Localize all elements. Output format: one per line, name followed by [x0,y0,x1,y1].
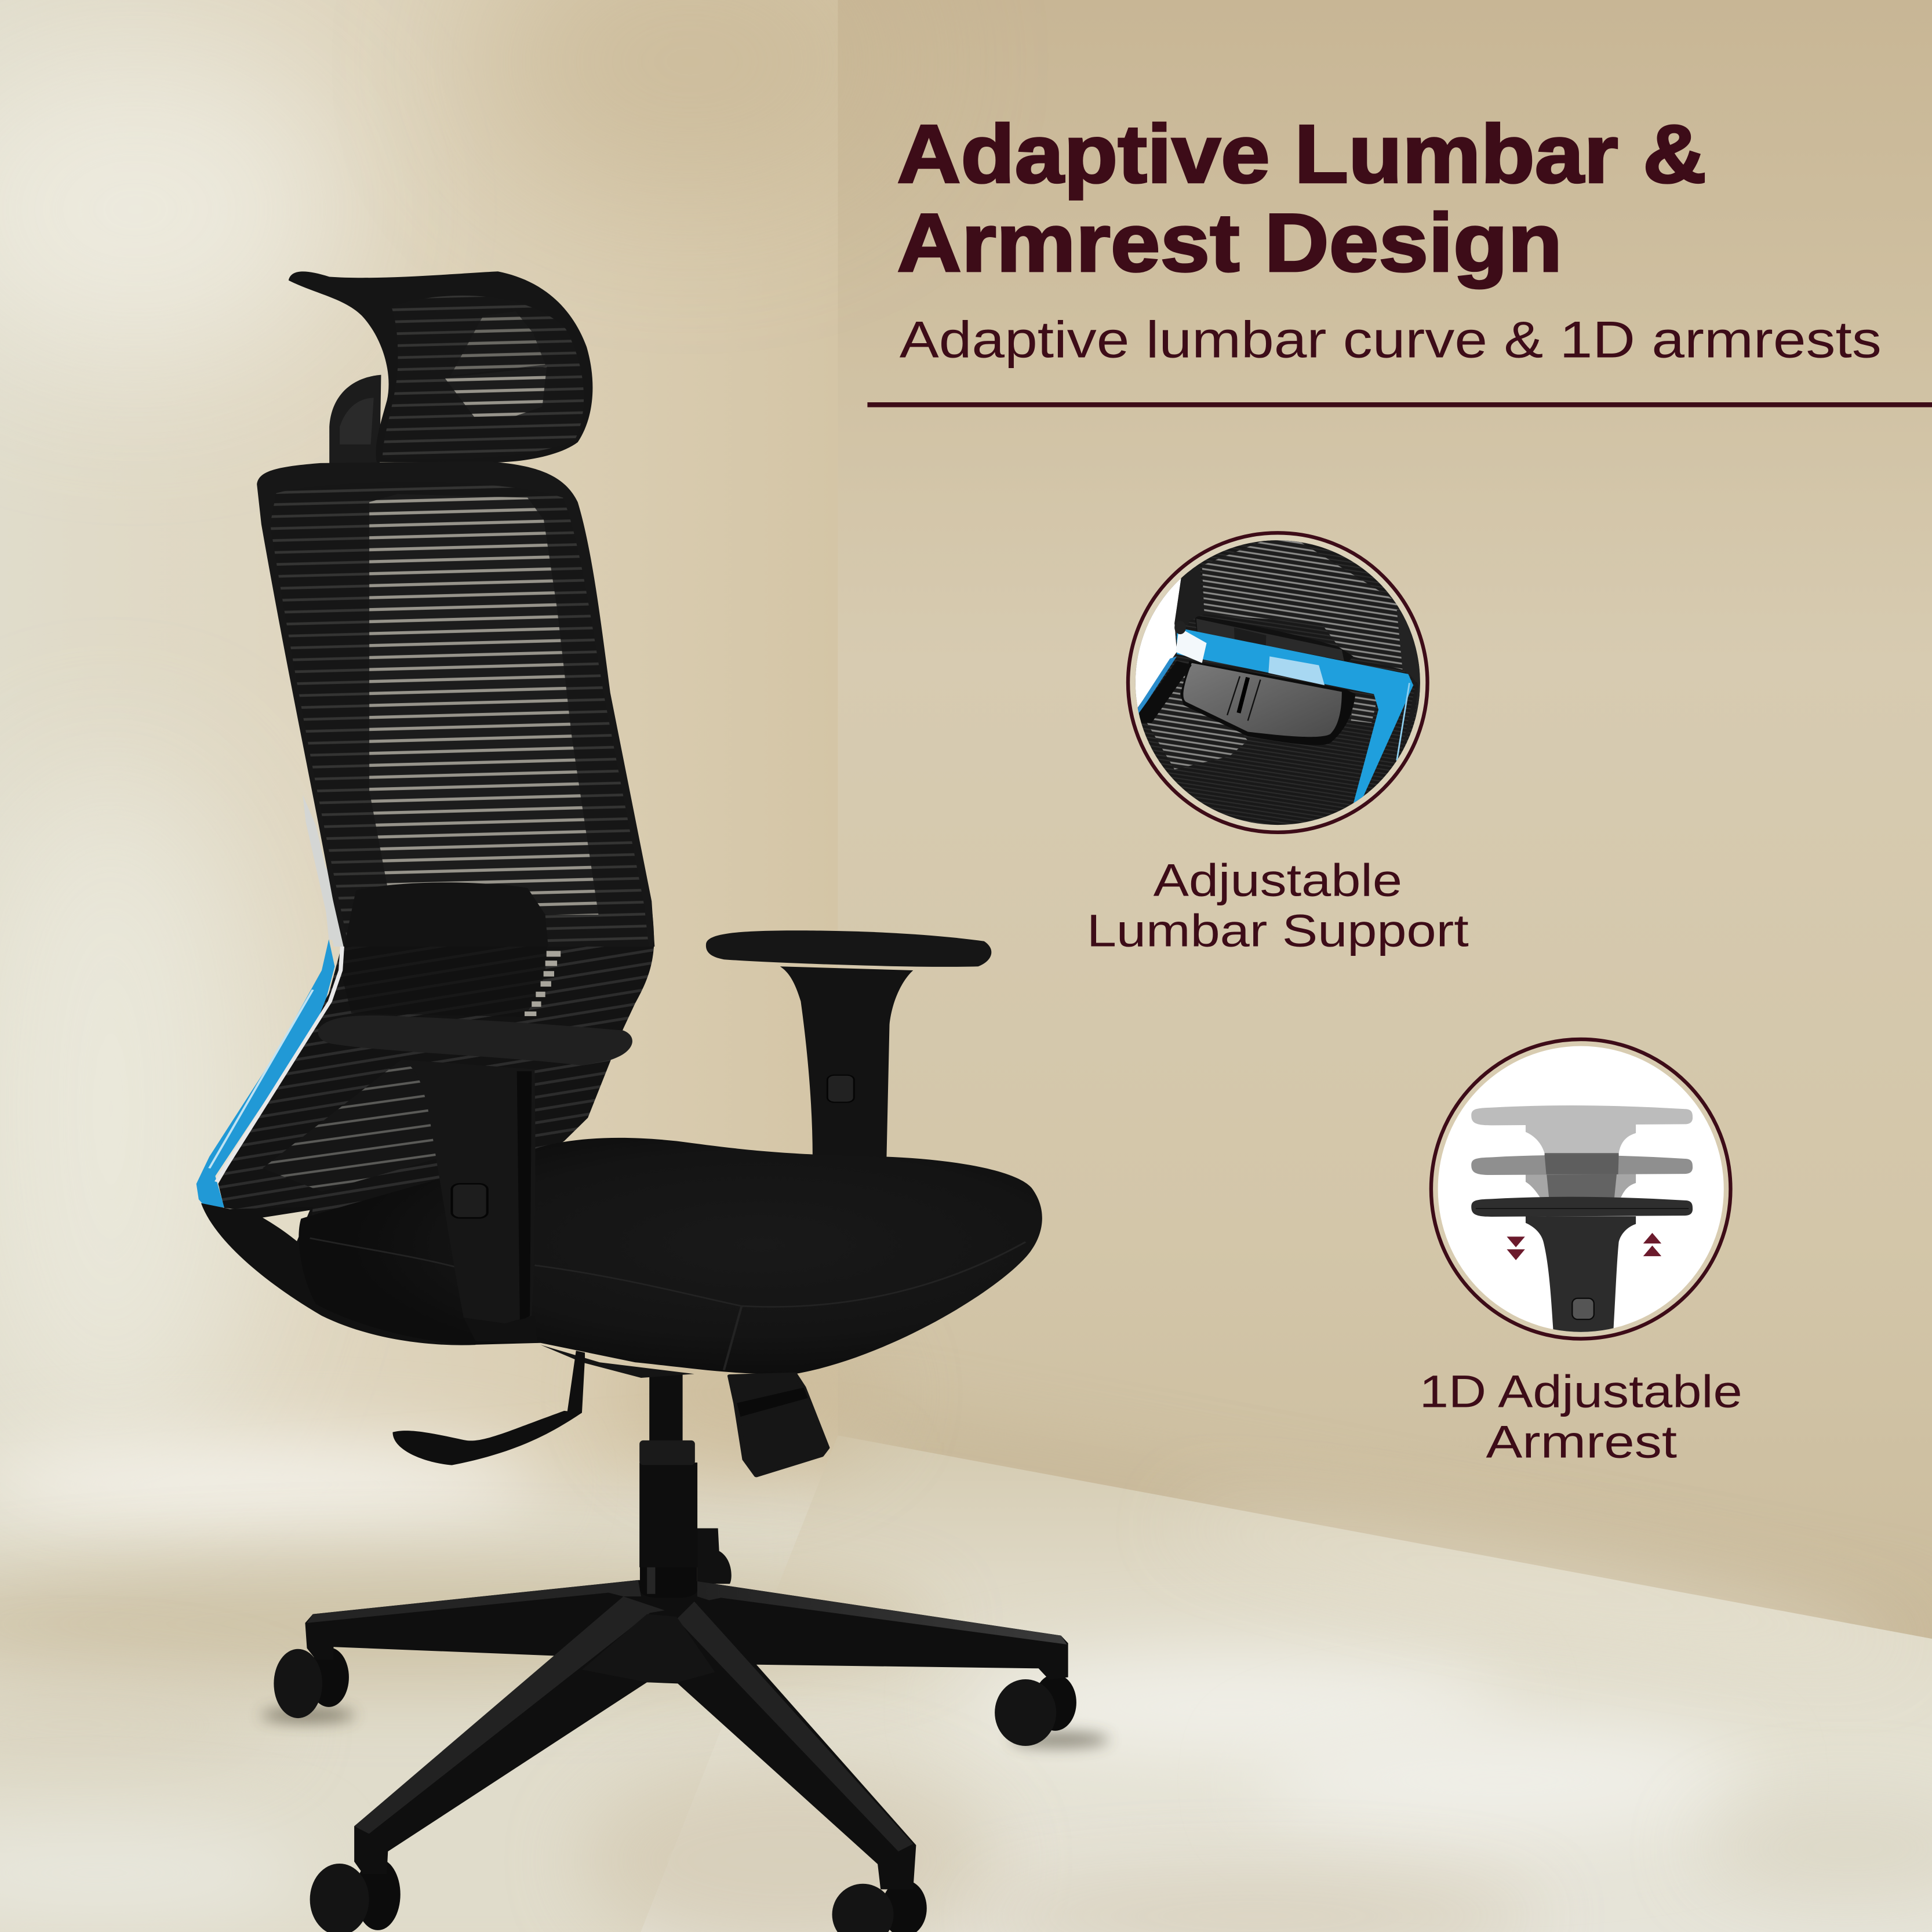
seat cushion [299,1138,1042,1374]
caster left [274,1647,349,1718]
label: adjustable lumbar support [1087,854,1469,956]
label: adjustable lumbar support: Adjustable [1154,854,1402,905]
backrest bright stripes [369,494,598,915]
label: 1D adjustable armrest: Armrest [1486,1417,1677,1468]
circle ring [1128,533,1428,832]
chair base [274,1520,1076,1932]
lumbar close-up photo [1135,540,1420,825]
lower chair body [197,869,1042,1476]
star base [305,1580,1068,1889]
lumbar pad region [340,881,547,1017]
under-seat mechanism [541,1345,694,1378]
callout: 1D adjustable armrest [1429,1038,1733,1341]
backrest dim stripes [270,482,649,947]
lower back mesh [218,869,654,1218]
rear armrest [706,930,991,1159]
ghost armrest high [1471,1105,1693,1153]
arrows up [1643,1233,1661,1256]
recline knob [730,1374,827,1476]
lower back stripes [263,1060,437,1192]
subheading: Adaptive lumbar curve & 1D armrests [900,310,1882,368]
chair [197,271,1109,1932]
divider line [867,402,1932,407]
heading [897,108,1707,289]
arrows down [1507,1236,1525,1260]
caster shadows [261,1708,1109,1747]
armrest height photo [1429,1038,1733,1341]
upper chair: backrest and headrest [257,271,654,947]
caster front right [832,1880,927,1932]
solid armrest [1471,1197,1693,1333]
blue frame strip [197,939,343,1211]
heading: Armrest Design [897,197,1562,289]
seat frame arc [201,1203,475,1345]
label: adjustable lumbar support: Lumbar Support [1087,905,1469,956]
caster right [995,1674,1076,1746]
heading: Adaptive Lumbar & [897,108,1707,201]
backrest mesh [257,461,654,947]
headrest bracket [329,375,381,467]
label: 1D adjustable armrest [1420,1366,1742,1468]
gas cylinder upper [639,1374,697,1567]
callout: adjustable lumbar support [1126,531,1429,834]
rear caster [697,1529,732,1584]
seat lever [392,1351,585,1465]
front armrest [318,1016,632,1343]
mesh gaps [525,951,561,1016]
headrest stripes [383,296,584,459]
silver frame edge lower [322,869,343,943]
label: 1D adjustable armrest: 1D Adjustable [1420,1366,1742,1417]
lumbar pad shadow [344,882,548,947]
ghost armrest middle [1471,1153,1693,1198]
headrest mesh [289,271,592,463]
silver frame edge [303,795,344,947]
circle ring [1431,1039,1730,1339]
gas cylinder [640,1520,697,1598]
caster front left [310,1858,401,1932]
